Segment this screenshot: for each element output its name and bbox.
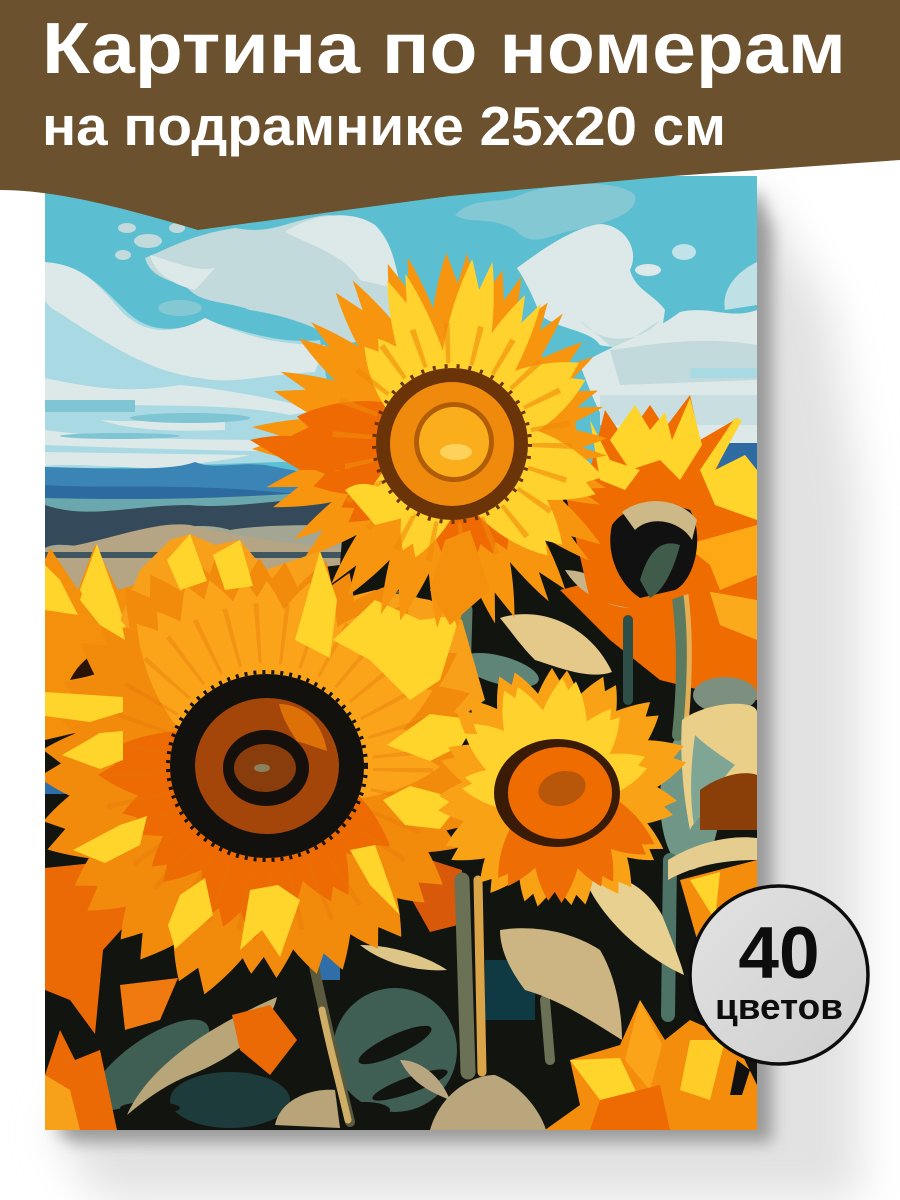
sunflower: right lower xyxy=(680,860,757,938)
dark green leaves xyxy=(78,579,757,1128)
cloud bands xyxy=(45,378,320,468)
yellow tips xyxy=(590,398,757,520)
sunflower: lower centre xyxy=(435,663,694,911)
deep orange left petals xyxy=(292,401,508,554)
top petal mass xyxy=(120,534,485,714)
blue accents xyxy=(45,780,535,1020)
title: Картина по номерам xyxy=(42,9,846,89)
seed head back xyxy=(610,505,697,598)
petal base xyxy=(45,558,470,994)
sunflower: bottom right xyxy=(545,1000,757,1130)
yellow petal highlights xyxy=(45,534,477,957)
right cloud mass xyxy=(580,310,757,443)
fields xyxy=(45,525,342,550)
badge caption: цветов xyxy=(715,986,843,1027)
sunflower: lower left dark orange xyxy=(45,862,297,1130)
badge number: 40 xyxy=(738,913,820,994)
upper yellow petals xyxy=(462,678,647,807)
petal streaks xyxy=(144,604,433,794)
deep orange petals xyxy=(98,731,405,943)
subtitle: на подрамнике 25х20 см xyxy=(42,95,726,157)
sky xyxy=(45,176,757,471)
beige leaves xyxy=(127,570,757,1130)
lower deep orange petals xyxy=(498,802,654,903)
painting: sunflowers on canvas xyxy=(29,176,757,1130)
canvas shadow xyxy=(55,188,860,1200)
badge: 40 colours xyxy=(690,886,868,1064)
big right cloud xyxy=(517,224,665,347)
pale sky patches xyxy=(455,184,635,240)
yellow top and right petals xyxy=(364,259,600,558)
banner xyxy=(0,0,900,230)
seed disk xyxy=(374,366,530,522)
seed disk xyxy=(168,672,366,860)
cloud base layers xyxy=(45,262,340,470)
sunflower: right back view xyxy=(560,395,757,610)
top amber petals xyxy=(136,580,440,798)
sunflower: left partial xyxy=(45,544,134,740)
dark foliage ground xyxy=(45,470,757,1130)
orange flower behind, right xyxy=(560,586,757,700)
mountains xyxy=(45,462,298,494)
stems xyxy=(306,560,689,1122)
sunflower: big left xyxy=(29,534,487,1008)
sunflower: top centre xyxy=(250,253,611,628)
